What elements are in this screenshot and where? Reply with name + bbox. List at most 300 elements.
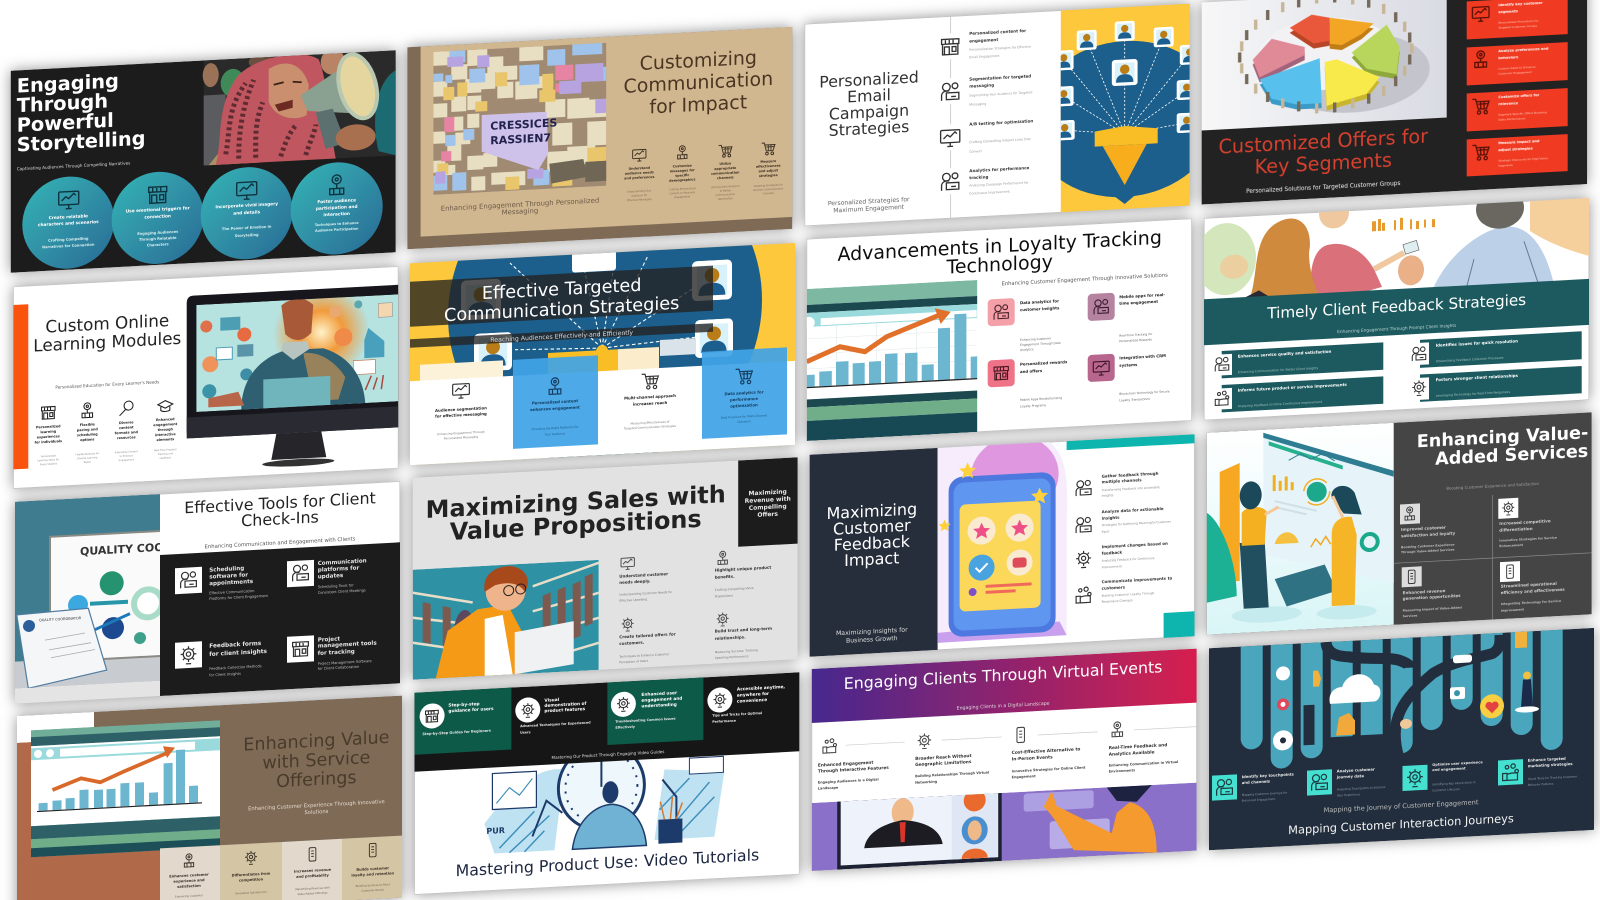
card: differentiation: Differentiates from — [232, 872, 271, 878]
item: appropriate channels: communication — [711, 170, 740, 176]
card: measure impact: Strategic Discounts for High-Value — [1498, 156, 1548, 163]
card: measure impact: adjust strategies — [1498, 146, 1533, 152]
illustration: tutorial desk sketch — [484, 737, 724, 854]
card: audience segmentation: Personalized Messaging — [444, 435, 478, 441]
title: Email — [847, 85, 891, 106]
item: broader reach — [915, 730, 989, 785]
accent bar — [13, 304, 28, 469]
item: communicate improvements — [1076, 575, 1172, 605]
item: data analytics: Analytics — [1020, 347, 1034, 352]
item: personalized content: Personalized content for — [969, 28, 1026, 36]
item: analyze data: insights — [1102, 515, 1120, 521]
item: operational efficiency: Integrating Technology for Service — [1501, 599, 1561, 606]
title: Advancements in Loyalty Tracking — [837, 227, 1162, 266]
panel: title column: Feedback — [834, 532, 911, 555]
illustration: shopper with laptop — [413, 560, 599, 680]
title: Effective Tools for Client — [184, 488, 376, 517]
photo: quality coordinator whiteboard: QUALITY COORD — [80, 540, 181, 558]
title: Learning Modules — [33, 328, 181, 356]
item: personalized content — [940, 29, 1031, 60]
item: scheduling software: software for — [209, 572, 248, 581]
item: understand audience: Effective Messaging — [627, 197, 652, 202]
item: A/B testing: Convert — [969, 149, 983, 154]
item: gather feedback: Gather feedback through — [1102, 471, 1159, 479]
item: flexible pacing: Flexible Modules for — [75, 452, 99, 456]
item: measure effectiveness: and adjust — [758, 168, 779, 173]
item: mobile apps: Real-Time Tracking for — [1119, 332, 1153, 338]
item: segmentation: Segmentation for targeted — [969, 73, 1031, 82]
item: tailored offers: Perception of Value — [619, 659, 648, 664]
subtitle: Enhancing Customer Engagement Through Innovative Solutions — [1002, 273, 1168, 287]
panel: title column: Maximizing — [826, 499, 917, 523]
item: tailored offers: Techniques to Enhance Customer — [618, 652, 670, 659]
title: Check-Ins — [241, 507, 319, 530]
item: communication platforms: Scheduling Tools for — [318, 583, 354, 589]
item: personalized rewards — [988, 356, 1068, 410]
title: Technology — [946, 251, 1053, 279]
feature: visual demonstration: demonstration of — [544, 701, 586, 709]
item: diverse content — [115, 401, 138, 462]
item: appropriate channels: Approaches — [718, 196, 733, 201]
title: Powerful — [17, 109, 114, 137]
circle: emotional triggers — [112, 169, 204, 266]
card: quick resolution — [1409, 331, 1582, 368]
item: cost-effective — [1012, 724, 1086, 779]
card: personalized content — [513, 355, 598, 449]
item: implement changes: Implement changes based on — [1102, 541, 1168, 549]
item: gather feedback — [1076, 471, 1160, 499]
circle: emotional triggers: Through Relatable — [139, 236, 177, 242]
card: multi-channel: Targeted Communication Strategies — [623, 424, 676, 431]
feature: step-by-step: Step-by-Step Guides for Beginners — [422, 729, 491, 736]
item: communicate improvements: Responsive Changes — [1102, 598, 1133, 604]
card: quick resolution: Streamlining Feedback Collection Processes — [1436, 356, 1504, 363]
item: enhanced engagement: through — [158, 427, 174, 432]
item: communication platforms — [287, 557, 367, 597]
item: measure effectiveness: Adapting Strategies for — [754, 182, 784, 188]
item: mobile apps: Mobile apps for real- — [1119, 292, 1165, 299]
slide: Customizing Communication for Impact — [407, 27, 792, 249]
item: appropriate channels: channels — [717, 175, 734, 180]
card: measure impact: Segments — [1498, 163, 1513, 168]
item: appropriate channels — [711, 144, 740, 201]
title: Enhancing Value- — [1417, 423, 1588, 452]
item: enhanced engagement: interactive — [155, 432, 176, 437]
item: gather feedback: Transforming Feedback into Actionable — [1101, 485, 1160, 492]
callout box: Offers — [757, 511, 778, 519]
item: optimize experience: Optimize user experience — [1432, 760, 1483, 767]
item: flexible pacing: Flexible — [80, 422, 95, 427]
item: project management: Project Management Software — [318, 659, 373, 666]
item: journey data: Analyze customer — [1337, 767, 1375, 774]
title: Maximizing Sales with — [426, 480, 726, 524]
item: real-time feedback: Environments — [1109, 768, 1135, 774]
big note — [482, 111, 548, 173]
feature: user engagement — [607, 677, 703, 745]
card: client relationships: Leveraging Technology for Real-Time Responses — [1436, 390, 1510, 398]
illustration: computer monitor — [187, 280, 398, 472]
card: analyze preferences: Analyze preferences and — [1498, 47, 1549, 53]
item: personalized content: Email Engagement — [969, 54, 1000, 59]
item: enhanced engagement: Real-Time Progress — [154, 448, 177, 452]
accent: top teal band — [1067, 434, 1195, 450]
item: enhanced engagement — [818, 736, 889, 791]
photo: sticky note wall: CRESSICES — [490, 116, 557, 133]
title: Enhancing Value — [243, 728, 389, 756]
title: Engaging — [17, 69, 119, 98]
title: Communication — [623, 68, 773, 98]
photo: quality coordinator whiteboard — [15, 493, 181, 704]
card: data analytics: performance — [730, 396, 758, 402]
item: operational efficiency: efficiency and effectiveness — [1501, 587, 1565, 595]
item: A/B testing — [940, 120, 1033, 153]
circle: vivid imagery: The Power of Emotion in — [222, 225, 272, 231]
title band — [410, 266, 713, 348]
photo: sticky note wall — [433, 42, 606, 195]
card: client relationships — [1409, 366, 1582, 402]
card: customize offers: Segment-Specific Offers Boosting — [1498, 110, 1547, 117]
item: customize messages: Crafting Personalized — [669, 186, 696, 191]
item: unique benefits — [715, 549, 771, 598]
circle: audience participation: interaction — [323, 211, 350, 218]
card: customer satisfaction: experience and — [173, 878, 205, 884]
item: competitive differentiation: Enhancement — [1499, 543, 1524, 548]
title: Mastering Product Use: Video Tutorials — [456, 845, 759, 880]
item: diverse content: resources — [117, 435, 136, 440]
item: measure effectiveness: Channels — [763, 191, 775, 195]
item: communication platforms: updates — [318, 573, 344, 580]
feature: visual demonstration — [515, 694, 591, 735]
item: real-time feedback: Real-Time Feedback and — [1109, 742, 1167, 751]
item: communicate improvements: customers — [1102, 584, 1126, 591]
item: competitive differentiation: differentiation — [1499, 526, 1533, 533]
item: implement changes: feedback — [1102, 550, 1123, 556]
title: Value Propositions — [450, 505, 702, 546]
item: personalized rewards: Personalized rewards — [1020, 359, 1068, 367]
title: Personalized — [819, 67, 919, 92]
title: for Impact — [649, 91, 747, 118]
item: improved satisfaction: Improved customer — [1401, 525, 1446, 532]
feature: accessible anytime: Tips and Tricks for Optimal — [712, 711, 762, 718]
card: identify segments: Targeted Customer Groups — [1497, 24, 1538, 30]
item: enhanced engagement: Landscape — [818, 786, 839, 791]
item: appropriate channels: Utilizing Data Analytics — [711, 184, 740, 189]
card: measure impact — [1467, 134, 1568, 176]
item: analytics: tracking — [969, 174, 988, 180]
card: analyze preferences: Customer Engagement — [1498, 70, 1533, 76]
item: enhanced engagement: Enhanced Engagement — [818, 760, 873, 769]
item: personalized learning: Learning Paths for — [37, 458, 59, 462]
item: diverse content: Diverse — [119, 420, 134, 425]
item: CRM integration: Blockchain Technology for Secure — [1119, 389, 1170, 396]
card: analyze preferences: Custom Deals to Enhance — [1498, 65, 1536, 71]
title: Storytelling — [17, 127, 146, 156]
card: future improvements — [1212, 376, 1383, 413]
card: customer satisfaction: Enhances customer — [169, 873, 209, 879]
card: customize offers: relevance — [1498, 101, 1519, 106]
item: personalized content: engagement — [969, 37, 998, 43]
item: communicate improvements: Communicate improvements to — [1102, 575, 1172, 584]
slide: Maximizing Sales with Value Propositions — [413, 457, 798, 680]
feature: visual demonstration: Visual — [544, 697, 560, 704]
item: unique benefits: Propositions — [715, 594, 733, 598]
card: audience segmentation — [435, 383, 487, 441]
item: CRM integration: Integration with CRM — [1119, 353, 1166, 360]
title: Strategies — [829, 117, 909, 140]
card: service quality: Enhances service quality and satisfaction — [1238, 349, 1331, 359]
item: personalized learning: learning — [40, 429, 57, 434]
item: mobile apps — [1088, 290, 1165, 345]
feature: accessible anytime: Accessible anytime, — [737, 684, 785, 693]
card: differentiation: Innovative Solutions for — [235, 890, 268, 895]
illustration: growth chart dashboard — [803, 280, 977, 441]
item: tailored offers: Create tailored offers for — [619, 631, 676, 639]
card: future improvements: Analyzing Feedback to Drive Continuous Improvement — [1238, 400, 1323, 408]
title: Key Segments — [1255, 148, 1392, 179]
item: data analytics — [988, 296, 1061, 354]
item: broader reach: Networking — [915, 780, 938, 785]
subtitle: Solutions — [304, 809, 329, 816]
card: personalized content: enhances engagement — [530, 404, 580, 412]
item: journey data — [1307, 766, 1386, 799]
item: tailored offers: customers. — [619, 640, 645, 646]
slide: Mastering Product Use: Video Tutorials — [414, 672, 799, 895]
item: understand needs: needs deeply. — [619, 578, 651, 585]
item: optimize experience: Customer Lifecycle — [1432, 787, 1460, 792]
item: measure effectiveness — [753, 142, 784, 196]
item: feedback forms: Feedback forms — [209, 641, 262, 650]
item: enhanced engagement: elements — [156, 437, 174, 442]
feature: user engagement: Troubleshooting Common Issues — [615, 717, 676, 724]
item: unique benefits: Crafting Compelling Value — [715, 586, 754, 592]
title: Effective Targeted — [482, 276, 642, 304]
item: customize messages: Content to Maximize — [669, 190, 696, 195]
panel: title column — [810, 448, 938, 657]
card: analyze preferences: behaviors — [1498, 55, 1518, 60]
item: analytics — [940, 166, 1030, 195]
item: touchpoints: Identify key touchpoints — [1242, 771, 1295, 779]
feature: visual demonstration: product features — [544, 706, 586, 714]
item: revenue generation: generation opportunities — [1403, 593, 1461, 601]
item: feedback forms: for client insights — [209, 649, 267, 658]
item: revenue generation: Services — [1403, 614, 1418, 618]
illustration: video call — [812, 778, 1197, 871]
card: data analytics: Data analytics for — [724, 389, 764, 396]
feature: accessible anytime: anywhere for — [737, 691, 770, 699]
card: customer satisfaction: Enhancing Customer — [175, 893, 204, 899]
slide: Personalized Email Campaign Strategies — [805, 2, 1220, 226]
item: measure effectiveness: Diverse Communication — [753, 186, 784, 192]
card: customer satisfaction — [160, 845, 220, 900]
divider — [950, 16, 951, 218]
item: implement changes — [1076, 541, 1168, 571]
slide: Enhancing Value with Service Offerings — [17, 696, 402, 900]
item: operational efficiency: Streamlined operational — [1501, 581, 1557, 589]
item: diverse content: Engagement — [119, 458, 134, 462]
item: touchpoints: Enhanced Engagement — [1242, 797, 1276, 803]
item: competitive differentiation: Innovative Strategies for Service — [1499, 536, 1557, 543]
circle: emotional triggers: connection — [144, 213, 171, 221]
item: targeted marketing: marketing strategies — [1528, 761, 1573, 768]
item: understand audience: Understanding Your — [627, 188, 653, 194]
item: cost-effective: Innovative Strategies for Online Client — [1012, 765, 1086, 773]
circle: vivid imagery: Storytelling — [235, 233, 259, 238]
item: flexible pacing — [75, 402, 99, 464]
title: Custom Online — [45, 310, 169, 337]
item: customize messages: demographics — [669, 177, 695, 183]
card: data analytics: Best Practices for Multi-Channel — [721, 413, 767, 420]
item: enhanced engagement: Through Interactive Features — [818, 765, 889, 775]
card: personalized content: Personalized content — [532, 398, 578, 406]
item: real-time feedback: Analytics Available — [1109, 749, 1155, 758]
card: revenue: Value-Added Offerings — [298, 891, 328, 896]
item: project management: Project — [318, 636, 340, 644]
item: understand audience: and preferences — [624, 175, 654, 181]
subtitle: Maximum Engagement — [833, 204, 905, 214]
circle: audience participation — [291, 160, 383, 257]
item: diverse content: content — [119, 425, 134, 430]
title: Offerings — [276, 768, 357, 792]
item: competitive differentiation — [1498, 496, 1557, 548]
item: A/B testing: Crafting Compelling Subject Lines that — [969, 137, 1031, 144]
panel: title column: Impact — [844, 548, 899, 570]
subtitle: Reaching Audiences Effectively and Efficiently — [490, 329, 633, 344]
item: CRM integration: Loyalty Transactions — [1119, 397, 1150, 402]
item: touchpoints: and channels — [1242, 779, 1271, 785]
item: appropriate channels: Utilize — [719, 161, 732, 166]
item: scheduling software: Scheduling — [209, 566, 244, 574]
item: operational efficiency: Improvement — [1501, 607, 1525, 613]
item: understand needs: Understanding Customer Needs for — [619, 590, 673, 597]
grid dividers — [1394, 490, 1592, 625]
circle: audience participation: Audience Participation — [315, 227, 359, 233]
item: communicate improvements: Building Customer Loyalty Through — [1102, 591, 1155, 598]
subtitle: Enhancing Engagement Through Prompt Client Insights — [1337, 323, 1457, 335]
title: Through — [17, 89, 108, 117]
item: touchpoints — [1212, 771, 1295, 804]
title: Added Services — [1435, 442, 1588, 470]
card: personalized content: Your Audience — [545, 431, 565, 437]
item: segmentation: Messaging — [969, 102, 986, 107]
item: flexible pacing: scheduling — [77, 432, 98, 437]
item: analyze data: Input — [1102, 529, 1110, 534]
title: Mapping Customer Interaction Journeys — [1288, 811, 1514, 837]
item: operational efficiency — [1500, 559, 1565, 613]
card: loyalty: loyalty and retention — [351, 871, 394, 878]
item: measure effectiveness: effectiveness — [756, 164, 781, 169]
item: personalized learning: experiences — [37, 434, 60, 439]
item: personalized learning — [35, 406, 62, 467]
item: data analytics: Enhancing Customer — [1020, 336, 1052, 342]
feature: user engagement: engagement and — [641, 696, 682, 704]
card: loyalty — [342, 836, 402, 900]
panel: audience funnel illustration — [1060, 4, 1190, 212]
item: touchpoints: Mapping Customer Journeys for — [1242, 791, 1288, 797]
item: real-time feedback: Enhancing Communication in Virtual — [1109, 760, 1178, 768]
card: revenue — [282, 839, 342, 900]
feature: step-by-step: Step-by-step — [448, 701, 480, 709]
item: personalized learning: Personalized — [41, 454, 56, 458]
illustration: journey map strips — [1241, 630, 1563, 771]
item: cost-effective: In-Person Events — [1012, 754, 1053, 762]
circle: emotional triggers: Use emotional triggers for — [126, 205, 191, 215]
item: mobile apps: Personalized Rewards — [1119, 337, 1152, 343]
subtitle: Enhancing Communication and Engagement with Clients — [205, 536, 356, 550]
item: appropriate channels: to Refine — [720, 188, 731, 193]
item: project management: for Client Collaboration — [318, 665, 359, 671]
card: future improvements: Informs future product or service improvements — [1238, 382, 1347, 393]
item: segmentation — [940, 74, 1032, 106]
item: personalized learning: Every Student — [40, 462, 57, 466]
slide: Engaging Clients Through Virtual Events — [812, 649, 1197, 871]
card: revenue: and profitability — [296, 873, 330, 879]
photo: quality coordinator whiteboard: QUALITY COORDINATOR — [39, 616, 82, 622]
slide: Timely Client Feedback Strategies — [1196, 184, 1589, 421]
item: appropriate channels: Communication — [715, 192, 736, 197]
feature: accessible anytime: Performance — [712, 719, 737, 724]
card: multi-channel: increases reach — [633, 400, 667, 407]
item: improved satisfaction: satisfaction and loyalty — [1401, 531, 1455, 538]
item: diverse content: formats and — [115, 430, 138, 435]
item: communication platforms: Communication — [318, 558, 367, 567]
item: enhanced engagement: Engaging Audiences in a Digital — [818, 777, 879, 785]
item: scheduling software: appointments — [209, 579, 254, 587]
item: data analytics: customer insights — [1020, 305, 1060, 312]
item: project management: for tracking — [318, 649, 355, 657]
item: gather feedback: multiple channels — [1102, 477, 1142, 484]
item: tailored offers — [618, 615, 676, 664]
illustration: analysts at dashboard — [1207, 423, 1394, 635]
card: multi-channel: Multi-channel approach — [624, 393, 676, 401]
item: appropriate channels: appropriate — [714, 166, 737, 171]
item: implement changes: Analyzing Feedback for Continuous — [1102, 556, 1155, 563]
slide: Enhancing Value-Added Services — [1207, 412, 1592, 635]
item: diverse content: to Enhance — [120, 454, 134, 458]
circle: vivid imagery: and details — [233, 209, 261, 217]
item: analytics: Analytics for performance — [969, 165, 1030, 173]
subtitle: Boosting Customer Experience and Satisfaction — [1446, 481, 1540, 491]
subtitle: Personalized Strategies for — [828, 196, 910, 207]
accent: bottom teal square — [1164, 611, 1195, 638]
title: with Service — [262, 748, 370, 774]
item: broader reach: Building Relationships Through Virtual — [915, 770, 989, 778]
item: measure effectiveness: strategies — [759, 173, 778, 178]
item: targeted marketing: Visual Tools for Tracking Customer — [1528, 774, 1578, 781]
item: build trust — [715, 610, 772, 660]
circle: audience participation: participation and — [316, 204, 358, 212]
card: analyze preferences — [1467, 42, 1568, 85]
item: scheduling software: Effective Communication — [209, 589, 254, 595]
callout box: Compelling — [749, 503, 787, 512]
band caption: Mastering Our Product Through Engaging Video Guides — [552, 749, 664, 760]
item: flexible pacing: Diverse Learning — [77, 456, 98, 460]
circle: audience participation: Techniques to Enhance — [315, 221, 359, 227]
item: unique benefits: Highlight unique product — [715, 565, 771, 573]
feature: step-by-step: guidance for users — [448, 706, 494, 714]
item: diverse content: Interactive Content — [115, 450, 138, 454]
photo: sticky note wall: RASSIEN7 — [490, 131, 551, 147]
item: understand audience: Audience for — [631, 193, 648, 198]
item: understand audience: audience needs — [625, 170, 654, 176]
item: personalized rewards: and offers — [1020, 368, 1043, 374]
card: differentiation: competition — [239, 877, 264, 883]
slide: Customized Offers for Key Segments — [1202, 0, 1587, 204]
item: competitive differentiation: Increased competitive — [1499, 518, 1551, 526]
panel: title column: Business Growth — [846, 635, 898, 645]
teal title band — [1204, 279, 1589, 345]
item: segmentation: Segmenting Your Audience for Targeted — [969, 90, 1032, 98]
card: service quality: Enhancing Communication for Better Client Insights — [1238, 366, 1318, 374]
